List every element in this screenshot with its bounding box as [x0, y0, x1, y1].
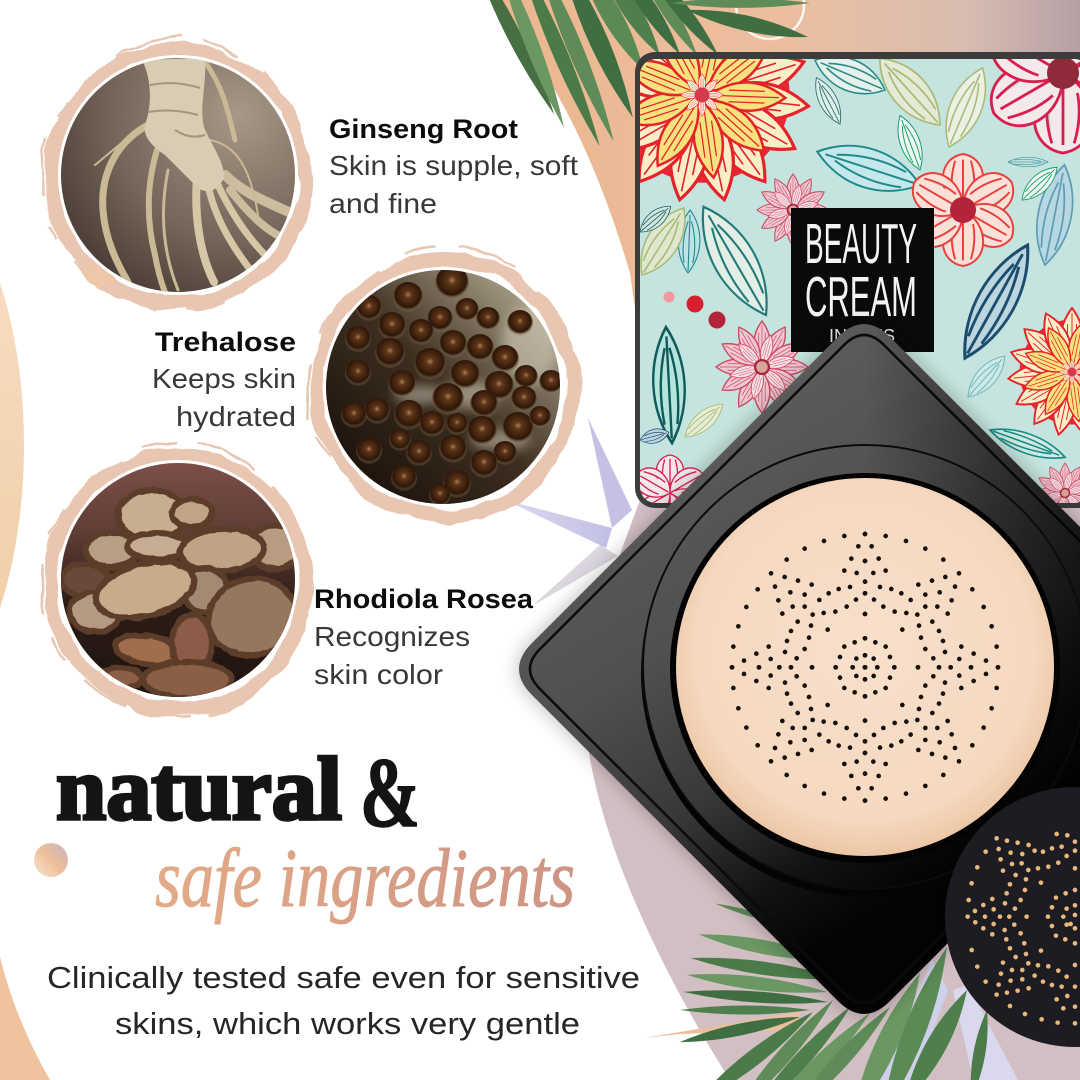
body text: Clinically tested safe even for sensitive: [47, 960, 640, 995]
background shape: lavender spike one: [880, 960, 948, 1080]
product: floral compact lid: [635, 52, 1080, 508]
lid label: BEAUTY CREAM: CREAM: [805, 265, 917, 329]
text: Trehalose: Trehalose: [155, 327, 296, 357]
case body: [519, 324, 1080, 1014]
product: black cushion compact: [519, 311, 1080, 1027]
decorative star spikes: [505, 418, 632, 606]
heading: natural &: natural: [56, 740, 342, 839]
case shadow: [519, 324, 1080, 1014]
thin white background arcs: [736, 0, 804, 39]
ring recess: [670, 473, 1060, 863]
brush ring: [307, 247, 579, 523]
ring right shading: [644, 446, 1080, 888]
brush ring: [41, 38, 311, 312]
background shape: peach spike lower right: [644, 1012, 800, 1038]
heading: safe ingredients: safe ingredients: [155, 832, 575, 925]
background shape: left peach arc: [0, 283, 24, 608]
ginseng photo: [58, 55, 298, 295]
lid label: BEAUTY CREAM: BEAUTY: [805, 212, 917, 276]
text: Rhodiola Rosea: Rhodiola Rosea: [314, 584, 534, 614]
product: sponge puff: [945, 787, 1080, 1047]
case top plate: [530, 335, 1080, 1003]
white border: [58, 460, 298, 700]
tapioca photo: [323, 266, 563, 507]
text: Trehalose: Keeps skin: [152, 363, 296, 394]
rhodiola photo: [58, 460, 304, 700]
brush ring: [41, 442, 311, 718]
lid floral pattern: [640, 59, 1080, 503]
text: Ginseng Root: Skin is supple, soft: [329, 150, 578, 181]
background shape: lavender spike two: [953, 985, 1018, 1080]
lid label: BEAUTY CREAM: INAKES: [829, 326, 895, 346]
heading: natural &: &: [360, 737, 420, 848]
text: Trehalose: [152, 327, 296, 432]
text: Rhodiola Rosea: Recognizes: [314, 621, 470, 652]
background shape: mauve lower right: [570, 480, 1080, 1080]
bottom palm fronds: [678, 901, 993, 1080]
ring shadow edge: [641, 449, 1080, 897]
paint blot: [84, 260, 116, 286]
decorative dot: [34, 843, 68, 877]
ingredient: ginseng root: [41, 38, 311, 312]
white border: [58, 55, 298, 295]
text: Trehalose: hydrated: [176, 401, 296, 432]
ingredient: trehalose: [307, 247, 579, 523]
text: Rhodiola Rosea: skin color: [314, 659, 443, 690]
lid label: BEAUTY CREAM: [791, 208, 934, 352]
white border: [323, 267, 563, 507]
cushion perforation pattern: [732, 534, 998, 801]
text: Rhodiola Rosea: [314, 584, 534, 690]
body text: [47, 960, 640, 1041]
text: Ginseng Root: and fine: [329, 188, 437, 219]
background shape: peach and mauve upper right: [490, 0, 1080, 430]
background shape: bottom left peach wedge: [0, 957, 50, 1080]
body text: skins, which works very gentle: [115, 1006, 580, 1041]
cushion powder: [676, 478, 1054, 856]
heading: natural &: [56, 737, 420, 848]
text: Ginseng Root: Ginseng Root: [329, 114, 518, 144]
ring outer: [643, 445, 1080, 889]
top palm fronds: [467, 0, 810, 149]
ingredient: rhodiola rosea: [41, 442, 311, 718]
case right shading: [864, 311, 1080, 1027]
text: Ginseng Root: [329, 114, 578, 219]
